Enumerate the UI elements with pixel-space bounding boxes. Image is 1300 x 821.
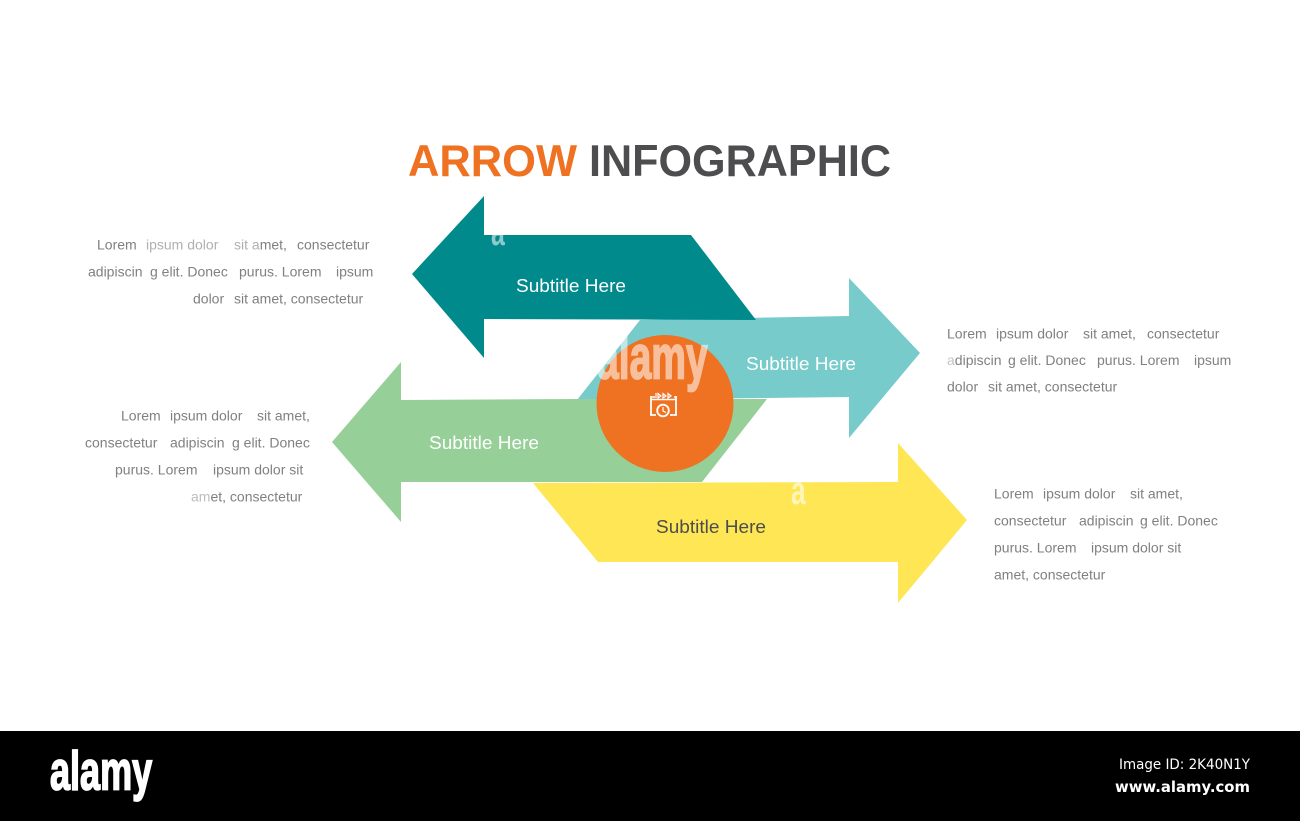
label: green arrow: Subtitle Here: [429, 433, 539, 453]
text block: upper right: purus. Lorem: [1097, 352, 1179, 368]
text block: middle left: purus. Lorem: [115, 462, 197, 478]
footer image id: Image ID: 2K40N1Y: [1119, 757, 1250, 773]
footer bar: [0, 731, 1300, 821]
text block: middle left: et, consectetur: [210, 488, 303, 504]
text block: lower right: sit amet,: [1130, 486, 1183, 502]
text block: lower right: g elit. Donec: [1140, 512, 1218, 528]
text block: upper right: dolor: [947, 378, 978, 394]
text block: middle left: Lorem: [121, 408, 161, 424]
text block: upper right: g elit. Donec: [1008, 352, 1086, 368]
text block: middle left: ipsum dolor sit: [213, 462, 303, 478]
text block: lower right: adipiscin: [1079, 512, 1133, 528]
arrow: dark teal pointing left: [412, 196, 756, 358]
footer logo: alamy: [50, 740, 152, 801]
watermark fragment: dark teal arrow: a: [491, 210, 505, 255]
watermark: alamy centre: alamy: [597, 322, 708, 392]
text block: top left: Lorem: [97, 236, 137, 252]
text block: lower right: ipsum dolor: [1043, 486, 1116, 502]
label: light teal arrow: Subtitle Here: [746, 354, 856, 374]
watermark fragment: yellow arrow: a: [791, 469, 807, 513]
footer website: www.alamy.com: [1115, 778, 1250, 796]
text block: upper right: Lorem: [947, 326, 987, 342]
text block: middle left: adipiscin: [170, 434, 224, 450]
arrow: green pointing left: [332, 362, 767, 522]
text block: top left: dolor: [193, 290, 224, 306]
text block: top left: g elit. Donec: [150, 264, 228, 280]
text block: upper right: a: [947, 352, 955, 368]
icon: calendar with clock: [651, 393, 676, 416]
text block: lower right: amet, consectetur: [994, 566, 1106, 582]
title: ARROW: [408, 137, 577, 186]
title: [408, 137, 891, 186]
centre circle: [596, 335, 734, 472]
text block: middle left: g elit. Donec: [232, 434, 310, 450]
arrow: light teal pointing right: [577, 278, 920, 438]
text block: lower right: Lorem: [994, 486, 1034, 502]
text block: upper right: consectetur: [1147, 326, 1220, 342]
text block: middle left: am: [191, 488, 210, 504]
text block: top left: purus. Lorem: [239, 264, 321, 280]
text block: top left: consectetur: [297, 236, 370, 252]
text block: upper right: sit amet, consectetur: [988, 378, 1118, 394]
text block: lower right: purus. Lorem: [994, 540, 1076, 556]
text block: top left: ipsum dolor: [146, 236, 219, 252]
label: yellow arrow: Subtitle Here: [656, 517, 766, 537]
label: dark teal arrow: Subtitle Here: [516, 276, 626, 296]
text block: middle left: ipsum dolor: [170, 408, 243, 424]
text block: top left: sit a: [234, 236, 260, 252]
text block: upper right: ipsum dolor: [996, 326, 1069, 342]
text block: lower right: consectetur: [994, 512, 1067, 528]
text block: top left: ipsum: [336, 264, 373, 280]
text block: middle left: consectetur: [85, 434, 158, 450]
text block: upper right: sit amet,: [1083, 326, 1136, 342]
arrow: yellow pointing right: [533, 443, 967, 603]
text block: top left: adipiscin: [88, 264, 142, 280]
text block: lower right: ipsum dolor sit: [1091, 540, 1181, 556]
text block: middle left: sit amet,: [257, 408, 310, 424]
text block: top left: sit amet, consectetur: [234, 290, 364, 306]
text block: upper right: dipiscin: [955, 352, 1002, 368]
text block: top left: met,: [260, 236, 287, 252]
title: INFOGRAPHIC: [589, 137, 891, 186]
text block: upper right: ipsum: [1194, 352, 1231, 368]
